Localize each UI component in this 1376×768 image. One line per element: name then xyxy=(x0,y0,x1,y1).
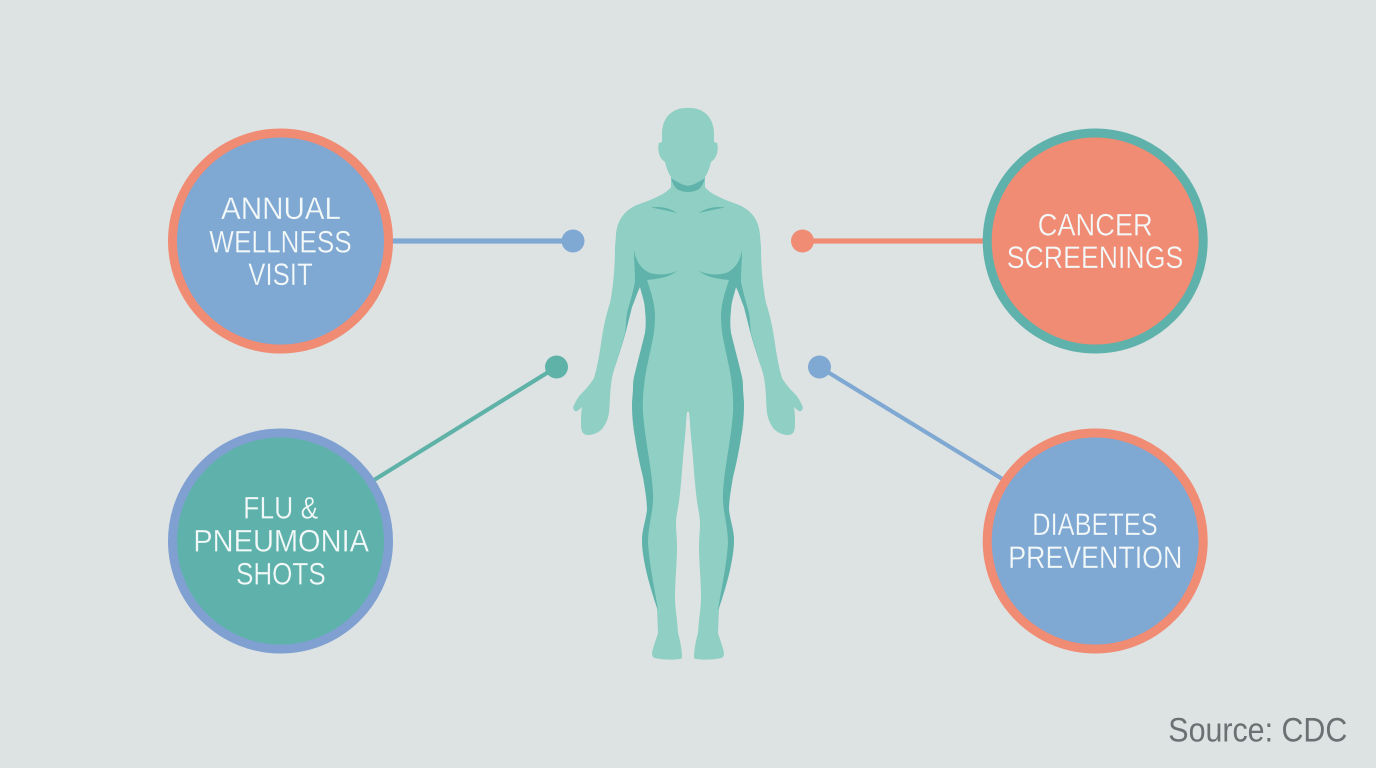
panel: flu and pneumonia shots xyxy=(172,433,388,649)
label: cancer screenings: CANCER xyxy=(1038,206,1153,242)
connector: cancer screenings xyxy=(791,230,985,252)
connector: diabetes prevention xyxy=(808,356,1004,480)
connector: flu and pneumonia shots xyxy=(374,356,568,480)
panel: annual wellness visit xyxy=(172,133,388,349)
label: flu and pneumonia shots: FLU & xyxy=(243,489,318,525)
label: flu and pneumonia shots: PNEUMONIA xyxy=(193,522,369,558)
label: cancer screenings: SCREENINGS xyxy=(1007,239,1183,275)
label: flu and pneumonia shots xyxy=(193,489,369,592)
label: cancer screenings xyxy=(1007,206,1183,275)
label: diabetes prevention: PREVENTION xyxy=(1008,539,1182,575)
panel: diabetes prevention xyxy=(987,433,1203,649)
label: diabetes prevention xyxy=(1008,506,1182,575)
label: annual wellness visit: ANNUAL xyxy=(221,190,341,226)
source note: Source: CDC xyxy=(1168,711,1347,749)
label: diabetes prevention: DIABETES xyxy=(1032,506,1158,542)
label: flu and pneumonia shots: SHOTS xyxy=(236,556,326,592)
central human body figure xyxy=(573,108,803,660)
label: annual wellness visit: VISIT xyxy=(248,256,313,292)
panel: cancer screenings xyxy=(987,133,1203,349)
connector: annual wellness visit xyxy=(390,230,584,252)
label: annual wellness visit xyxy=(209,190,352,292)
label: annual wellness visit: WELLNESS xyxy=(209,223,352,259)
